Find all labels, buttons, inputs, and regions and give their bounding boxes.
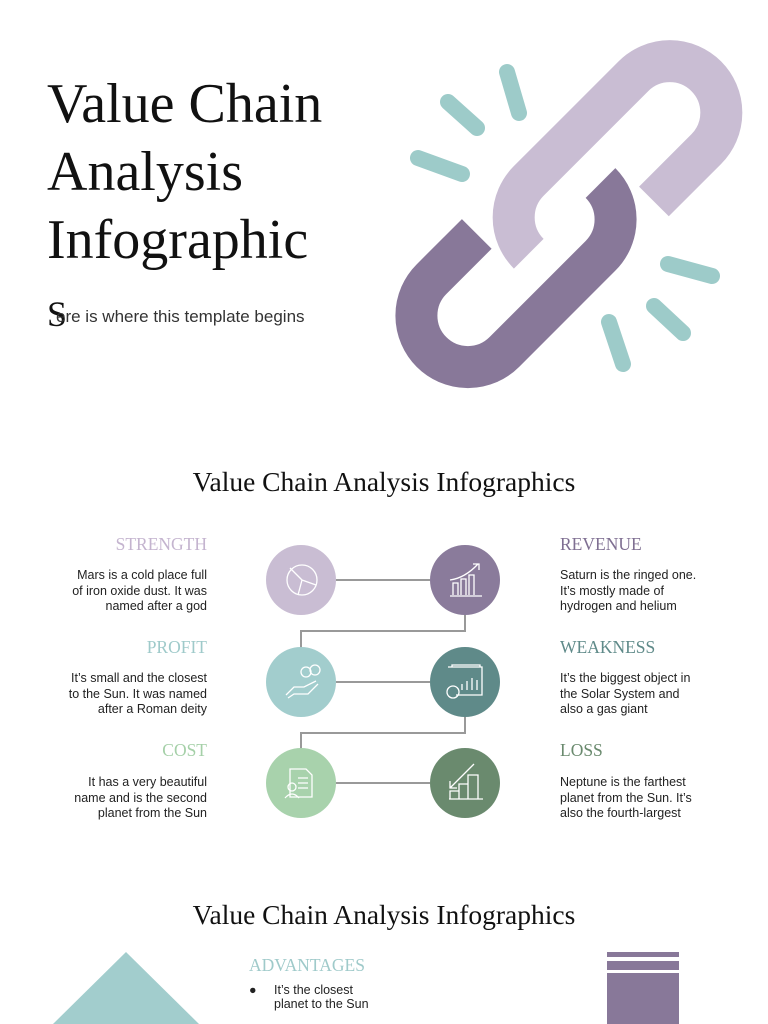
title: Infographic <box>47 209 308 271</box>
diagram <box>266 545 500 818</box>
purple bars <box>607 952 679 1024</box>
text: It’s the biggest object in the Solar System and also a gas giant <box>560 671 690 716</box>
text: PROFIT <box>147 637 207 657</box>
light link <box>492 40 743 290</box>
section heading 2: Value Chain Analysis Infographics <box>193 899 575 930</box>
right texts: REVENUE <box>560 534 642 554</box>
dark link <box>395 147 637 388</box>
dashes <box>418 72 712 364</box>
text: It’s small and the closest to the Sun. It was named after a Roman deity <box>69 671 207 716</box>
subtitle <box>47 294 305 334</box>
title: Value Chain <box>47 73 322 135</box>
text: LOSS <box>560 740 603 760</box>
title <box>47 73 322 271</box>
text: WEAKNESS <box>560 637 655 657</box>
advantages: ADVANTAGES <box>249 955 365 975</box>
text: COST <box>162 740 207 760</box>
text: Neptune is the farthest planet from the Sun. It’s also the fourth-largest <box>560 775 692 820</box>
left texts: STRENGTH <box>116 534 207 554</box>
triangle <box>53 952 199 1024</box>
advantages <box>249 955 369 1011</box>
subtitle: ere is where this template begins <box>56 307 305 326</box>
subtitle: S <box>47 294 67 334</box>
text: Saturn is the ringed one. It’s mostly made of hydrogen and helium <box>560 568 696 613</box>
text: It has a very beautiful name and is the second planet from the Sun <box>74 775 207 820</box>
illustration: chain link <box>395 40 742 388</box>
section heading 1: Value Chain Analysis Infographics <box>193 466 575 497</box>
advantages: ● <box>249 983 257 997</box>
title: Analysis <box>47 141 243 203</box>
text: Mars is a cold place full of iron oxide dust. It was named after a god <box>72 568 207 613</box>
advantages: It’s the closest planet to the Sun <box>274 983 369 1011</box>
